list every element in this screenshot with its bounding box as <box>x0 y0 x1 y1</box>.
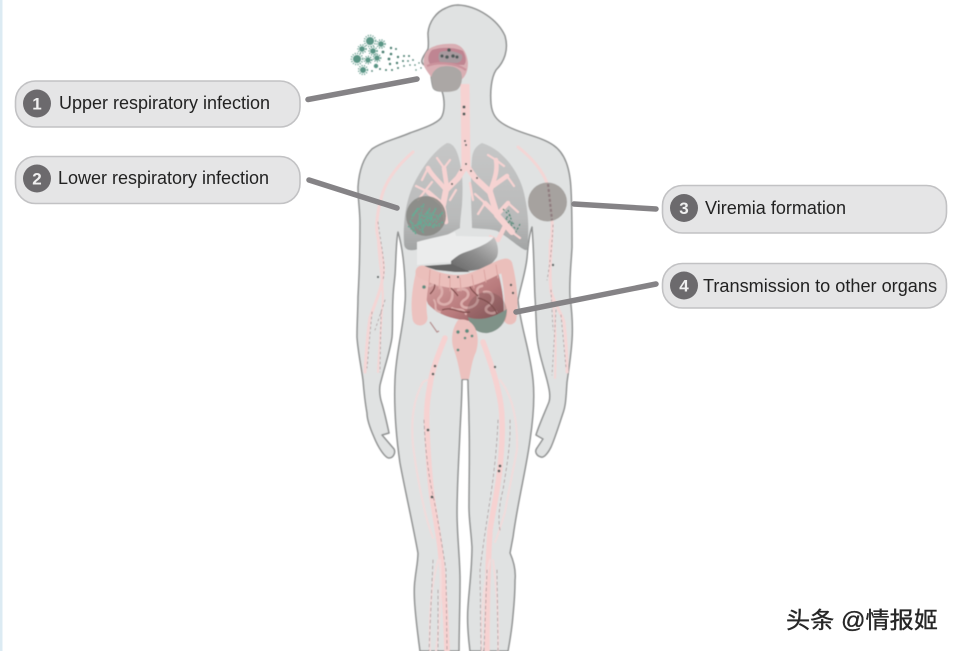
arm virus circle <box>528 182 567 222</box>
bladder and rectum <box>452 319 478 379</box>
liver <box>417 232 493 265</box>
shadow under liver <box>423 264 470 272</box>
callout 3: viremia formation: Viremia formation <box>705 198 846 218</box>
arrow line 1 <box>308 79 417 100</box>
callout 1: upper respiratory infection <box>16 81 300 127</box>
callout 4: transmission to other organs: 4 <box>679 276 689 296</box>
body silhouette <box>357 5 572 651</box>
blood-borne virus dots <box>377 48 554 498</box>
exhaled virus particles <box>351 35 422 74</box>
small intestine <box>425 272 504 322</box>
callout 3: viremia formation: 3 <box>679 199 689 218</box>
throat and trachea <box>465 84 466 168</box>
arm and leg blood vessels <box>365 147 567 651</box>
right lung green infection spots <box>503 209 520 232</box>
bronchial tree <box>416 155 520 240</box>
intestine transmission circle <box>467 292 507 333</box>
human body figure <box>357 5 572 651</box>
stomach <box>451 237 498 271</box>
callout 2: lower respiratory infection: Lower respiratory infection <box>58 168 269 188</box>
lung infection circle <box>406 196 446 236</box>
arrow line 2 <box>309 180 397 208</box>
callout 1: upper respiratory infection: 1 <box>32 94 42 114</box>
watermark: 头条 @情报姬 <box>786 607 938 633</box>
callout 3: viremia formation <box>662 186 946 233</box>
callout 1: upper respiratory infection: Upper respiratory infection <box>59 93 270 113</box>
head cavities <box>424 44 468 92</box>
colon <box>419 265 511 318</box>
callout 4: transmission to other organs <box>662 264 946 308</box>
arrow line 4 <box>516 284 656 312</box>
callout 4: transmission to other organs: Transmission to other organs <box>703 276 937 296</box>
callout 2: lower respiratory infection: 2 <box>32 170 42 188</box>
left edge strip <box>0 0 2 651</box>
arrow line 3 <box>574 204 656 209</box>
left lung <box>404 143 463 250</box>
right lung <box>471 143 528 250</box>
callout 2: lower respiratory infection <box>16 156 300 204</box>
